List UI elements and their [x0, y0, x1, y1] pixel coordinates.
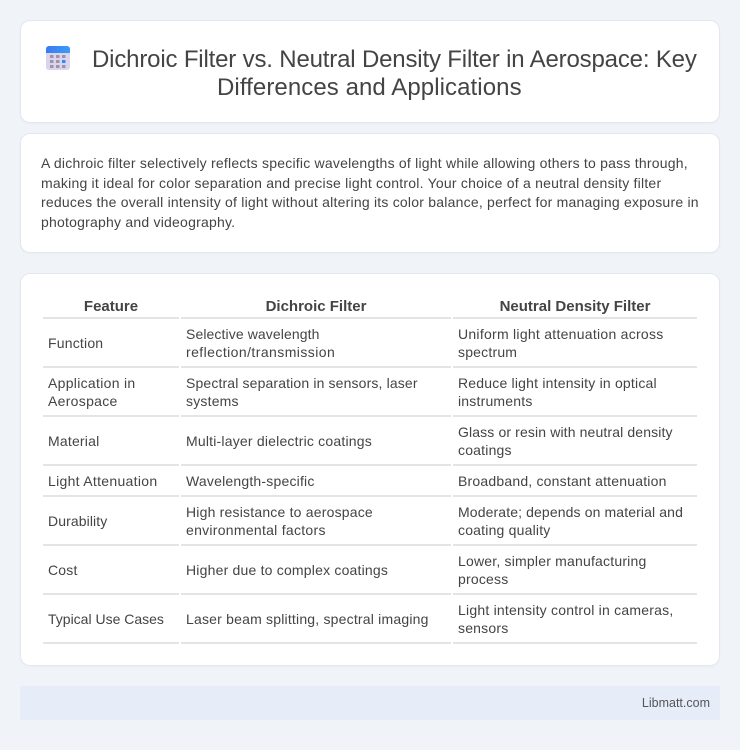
- row: Cost: Higher due to complex coatings: [186, 562, 388, 578]
- header: Feature: Feature: [84, 298, 138, 315]
- panel: comparison table card: [20, 273, 720, 666]
- panel: intro text card: [20, 133, 720, 253]
- footer credit: Libmatt.com: [642, 696, 710, 710]
- intro paragraph: [41, 155, 699, 230]
- row: Application in Aerospace: [48, 375, 657, 409]
- row: Function: Function: [48, 335, 103, 351]
- row: Material: [48, 424, 673, 458]
- row: Durability: Moderate; depends on material and: [458, 504, 683, 520]
- row: Material: Multi-layer dielectric coatings: [186, 433, 372, 449]
- header: Neutral Density Filter: Neutral Density Filter: [500, 298, 650, 315]
- row: Application in Aerospace: Reduce light intensity in optical: [458, 375, 657, 391]
- row: Application in Aerospace: Aerospace: [48, 393, 118, 409]
- row: Light Attenuation: Light Attenuation: [48, 473, 157, 489]
- title: Dichroic Filter vs. Neutral Density Filter in Aerospace: Key: [92, 46, 697, 73]
- row: Material: Glass or resin with neutral density: [458, 424, 673, 440]
- row: Material: coatings: [458, 442, 512, 458]
- row: Application in Aerospace: Application in: [48, 375, 135, 391]
- row: Application in Aerospace: Spectral separation in sensors, laser: [186, 375, 418, 391]
- row: Typical Use Cases: Typical Use Cases: [48, 611, 164, 627]
- row: Light Attenuation: Wavelength-specific: [186, 473, 315, 489]
- row: Durability: Durability: [48, 513, 107, 529]
- row: Durability: [48, 504, 683, 538]
- row: Light Attenuation: [48, 473, 667, 489]
- row: Typical Use Cases: sensors: [458, 620, 508, 636]
- title: [92, 46, 697, 101]
- row: Function: [48, 326, 664, 360]
- row: Cost: Lower, simpler manufacturing: [458, 553, 646, 569]
- row: Cost: [48, 553, 646, 587]
- header: Dichroic Filter: Dichroic Filter: [266, 298, 366, 315]
- row: Function: Selective wavelength: [186, 326, 320, 342]
- row: Cost: Cost: [48, 562, 78, 578]
- row: Material: Material: [48, 433, 99, 449]
- row: Durability: coating quality: [458, 522, 551, 538]
- row: Function: reflection/transmission: [186, 344, 335, 360]
- row: Cost: process: [458, 571, 508, 587]
- row: Typical Use Cases: [48, 602, 673, 636]
- footer bar: [20, 686, 720, 720]
- row: Durability: High resistance to aerospace: [186, 504, 373, 520]
- icon: calendar grid: [46, 46, 70, 70]
- title: Differences and Applications: [217, 74, 522, 101]
- row: Light Attenuation: Broadband, constant attenuation: [458, 473, 667, 489]
- row: Application in Aerospace: systems: [186, 393, 239, 409]
- intro paragraph: making it ideal for color separation and precise light control. Your choice of a neutral density filter: [41, 175, 661, 191]
- row: Durability: environmental factors: [186, 522, 326, 538]
- intro paragraph: photography and videography.: [41, 214, 235, 230]
- row: Function: spectrum: [458, 344, 517, 360]
- intro paragraph: A dichroic filter selectively reflects specific wavelengths of light while allowing others to pass through,: [41, 155, 688, 171]
- panel: title card: [20, 20, 720, 123]
- intro paragraph: reduces the overall intensity of light without altering its color balance, perfect for managing exposure in: [41, 194, 699, 210]
- row: Application in Aerospace: instruments: [458, 393, 533, 409]
- row: Function: Uniform light attenuation across: [458, 326, 664, 342]
- row: Typical Use Cases: Light intensity control in cameras,: [458, 602, 673, 618]
- row: Typical Use Cases: Laser beam splitting, spectral imaging: [186, 611, 429, 627]
